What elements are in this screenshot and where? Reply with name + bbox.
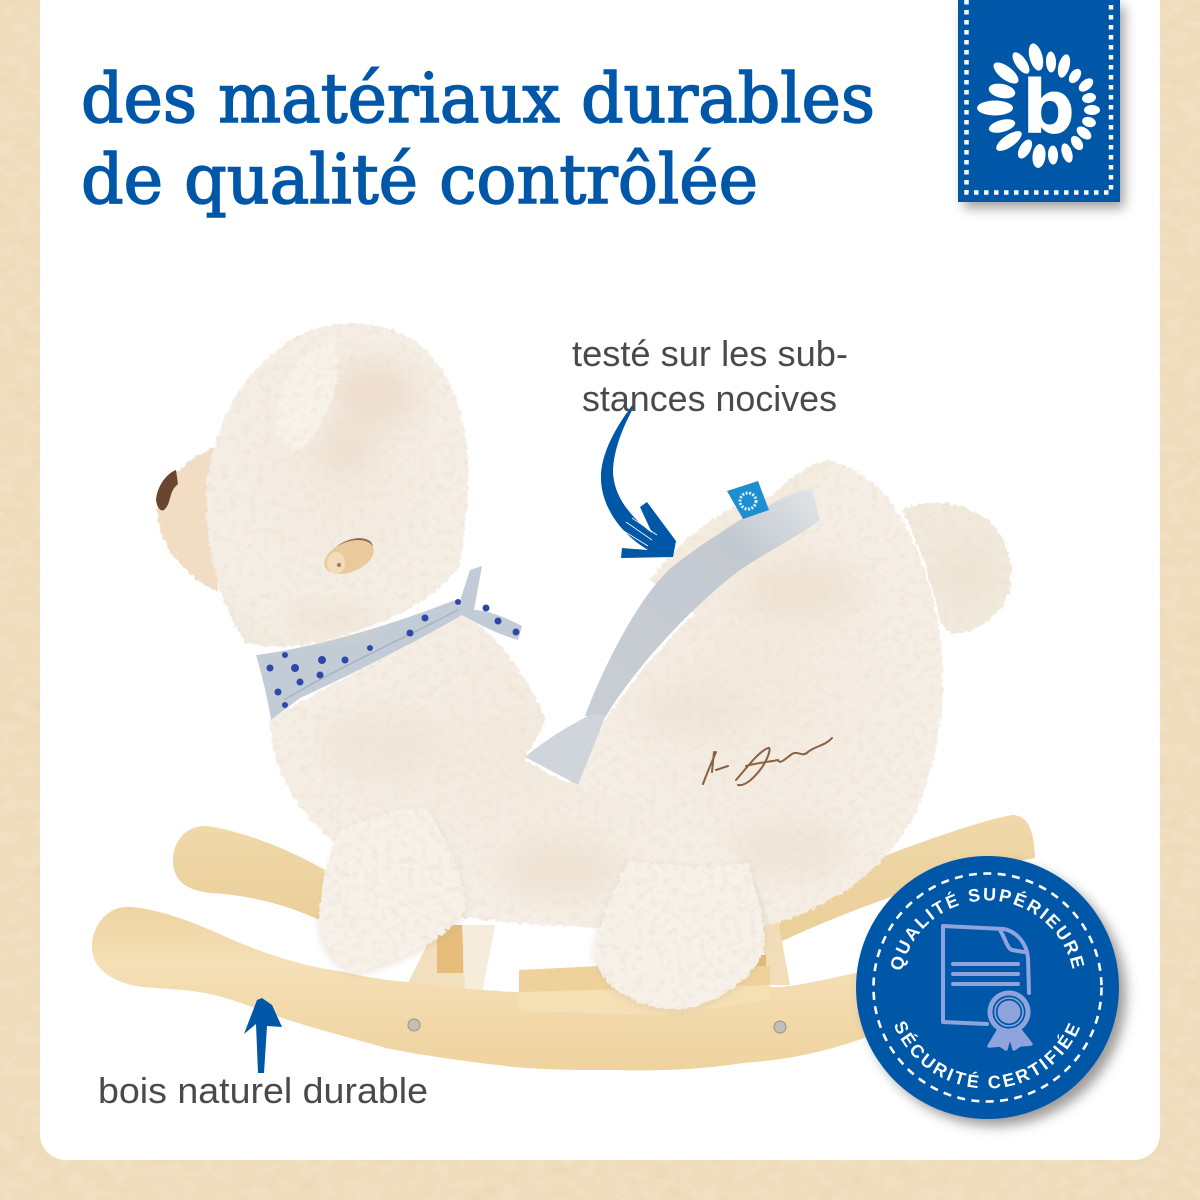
quality badge [856, 856, 1134, 1134]
arrow: to label tag [601, 404, 676, 558]
badge curved text: SÉCURITÉ CERTIFIÉE [894, 1021, 1080, 1088]
title: de qualité contrôlée [81, 141, 758, 220]
icon: certificate [943, 926, 1031, 1049]
logo letter b: b [1022, 65, 1075, 151]
head [206, 323, 468, 647]
text: tested for harmful substances: testé sur les sub- [572, 333, 848, 374]
screws [408, 1019, 786, 1033]
back rocker [173, 815, 1035, 942]
front leg [319, 807, 466, 975]
text: tested for harmful substances [572, 333, 848, 419]
text: tested for harmful substances: stances nocives [582, 378, 837, 419]
scarf [256, 566, 522, 720]
logo flower petals [977, 42, 1100, 169]
muzzle [158, 447, 218, 592]
tail [902, 503, 1011, 633]
body fur [270, 612, 770, 931]
text: durable natural wood: bois naturel durable [98, 1070, 428, 1111]
front rocker [92, 907, 880, 1070]
rear leg [593, 860, 764, 1012]
badge curved text: QUALITÉ SUPÉRIEURE [891, 888, 1084, 970]
nose [156, 470, 178, 510]
arrow: to wooden rocker [244, 998, 282, 1073]
badge curved text [891, 888, 1084, 1088]
title [81, 60, 875, 220]
brand tag logo [958, 0, 1124, 208]
product: rocking bear [92, 323, 1035, 1070]
brand label [727, 481, 769, 519]
wooden peg [319, 532, 379, 581]
wooden stands [407, 920, 790, 992]
grey seat lining [525, 481, 820, 785]
platform block [519, 966, 770, 1015]
rear seat fur [565, 464, 943, 930]
title: des matériaux durables [81, 60, 875, 139]
embroidered signature [703, 738, 832, 785]
seat rim fur [650, 460, 860, 620]
ear [277, 340, 337, 450]
